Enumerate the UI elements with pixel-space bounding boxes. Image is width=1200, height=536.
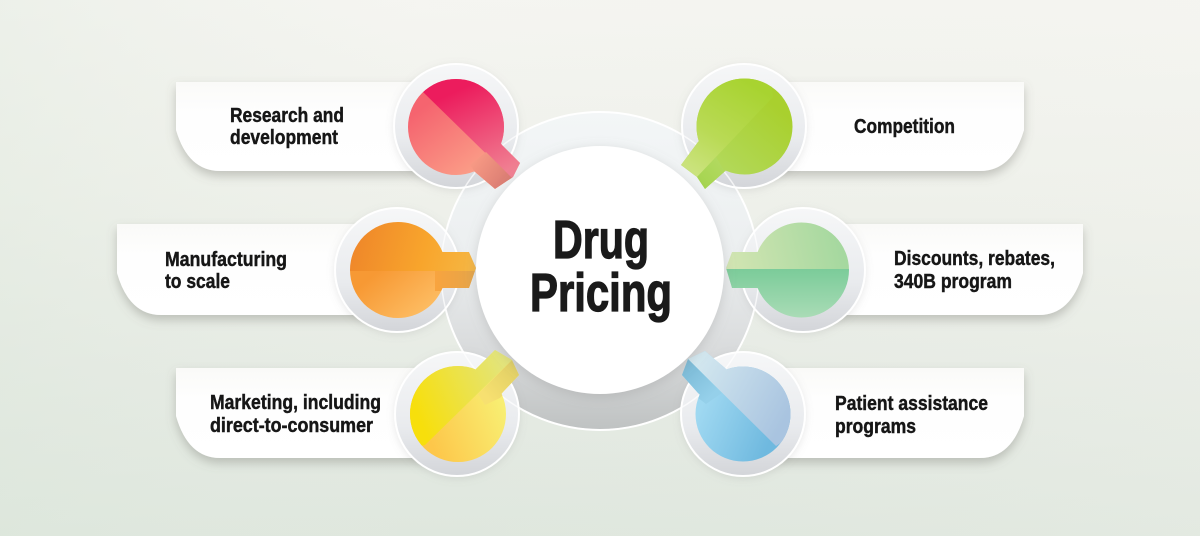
label: research and development xyxy=(230,105,344,149)
label: marketing, including direct-to-consumer: direct-to-consumer xyxy=(210,415,373,437)
disc: lime xyxy=(682,64,806,188)
ring outline over discs xyxy=(441,112,759,430)
disc: red xyxy=(394,64,518,188)
label: discounts, rebates, 340B program: Discounts, rebates, xyxy=(894,248,1055,270)
label: marketing, including direct-to-consumer xyxy=(210,392,381,437)
center circle xyxy=(476,146,724,394)
icon: orange pill xyxy=(350,222,476,318)
label: research and development: Research and xyxy=(230,105,344,127)
label: patient assistance programs: Patient assistance xyxy=(835,393,988,415)
icon: mint pill xyxy=(726,222,849,318)
disc: mint xyxy=(741,208,865,332)
disc: orange xyxy=(335,208,459,332)
label: manufacturing to scale: to scale xyxy=(165,271,230,293)
label: discounts, rebates, 340B program: 340B program xyxy=(894,271,1012,293)
label: marketing, including direct-to-consumer: Marketing, including xyxy=(210,392,381,414)
title: Pricing xyxy=(530,263,672,323)
panel: marketing card xyxy=(176,368,470,458)
title: Drug xyxy=(553,210,649,270)
label: research and development: development xyxy=(230,127,338,149)
icon: blue pill xyxy=(682,351,790,462)
label: manufacturing to scale xyxy=(165,249,287,293)
panel: competition card xyxy=(730,82,1024,171)
icon: lime pill xyxy=(681,78,792,189)
label: competition: Competition xyxy=(854,116,955,138)
panel: manufacturing card xyxy=(117,224,410,315)
disc: yellow xyxy=(395,352,519,476)
panel: patient assistance card xyxy=(730,368,1024,458)
title xyxy=(530,210,672,323)
icon: red pill xyxy=(408,79,520,189)
panel: research and development card xyxy=(176,82,470,171)
disc: blue xyxy=(681,352,805,476)
label: patient assistance programs xyxy=(835,393,988,438)
outer ring xyxy=(441,112,759,430)
panel: discounts card xyxy=(790,224,1083,315)
label: discounts, rebates, 340B program xyxy=(894,248,1055,293)
label: manufacturing to scale: Manufacturing xyxy=(165,249,287,271)
label: patient assistance programs: programs xyxy=(835,416,916,438)
icon: yellow pill xyxy=(410,350,519,462)
